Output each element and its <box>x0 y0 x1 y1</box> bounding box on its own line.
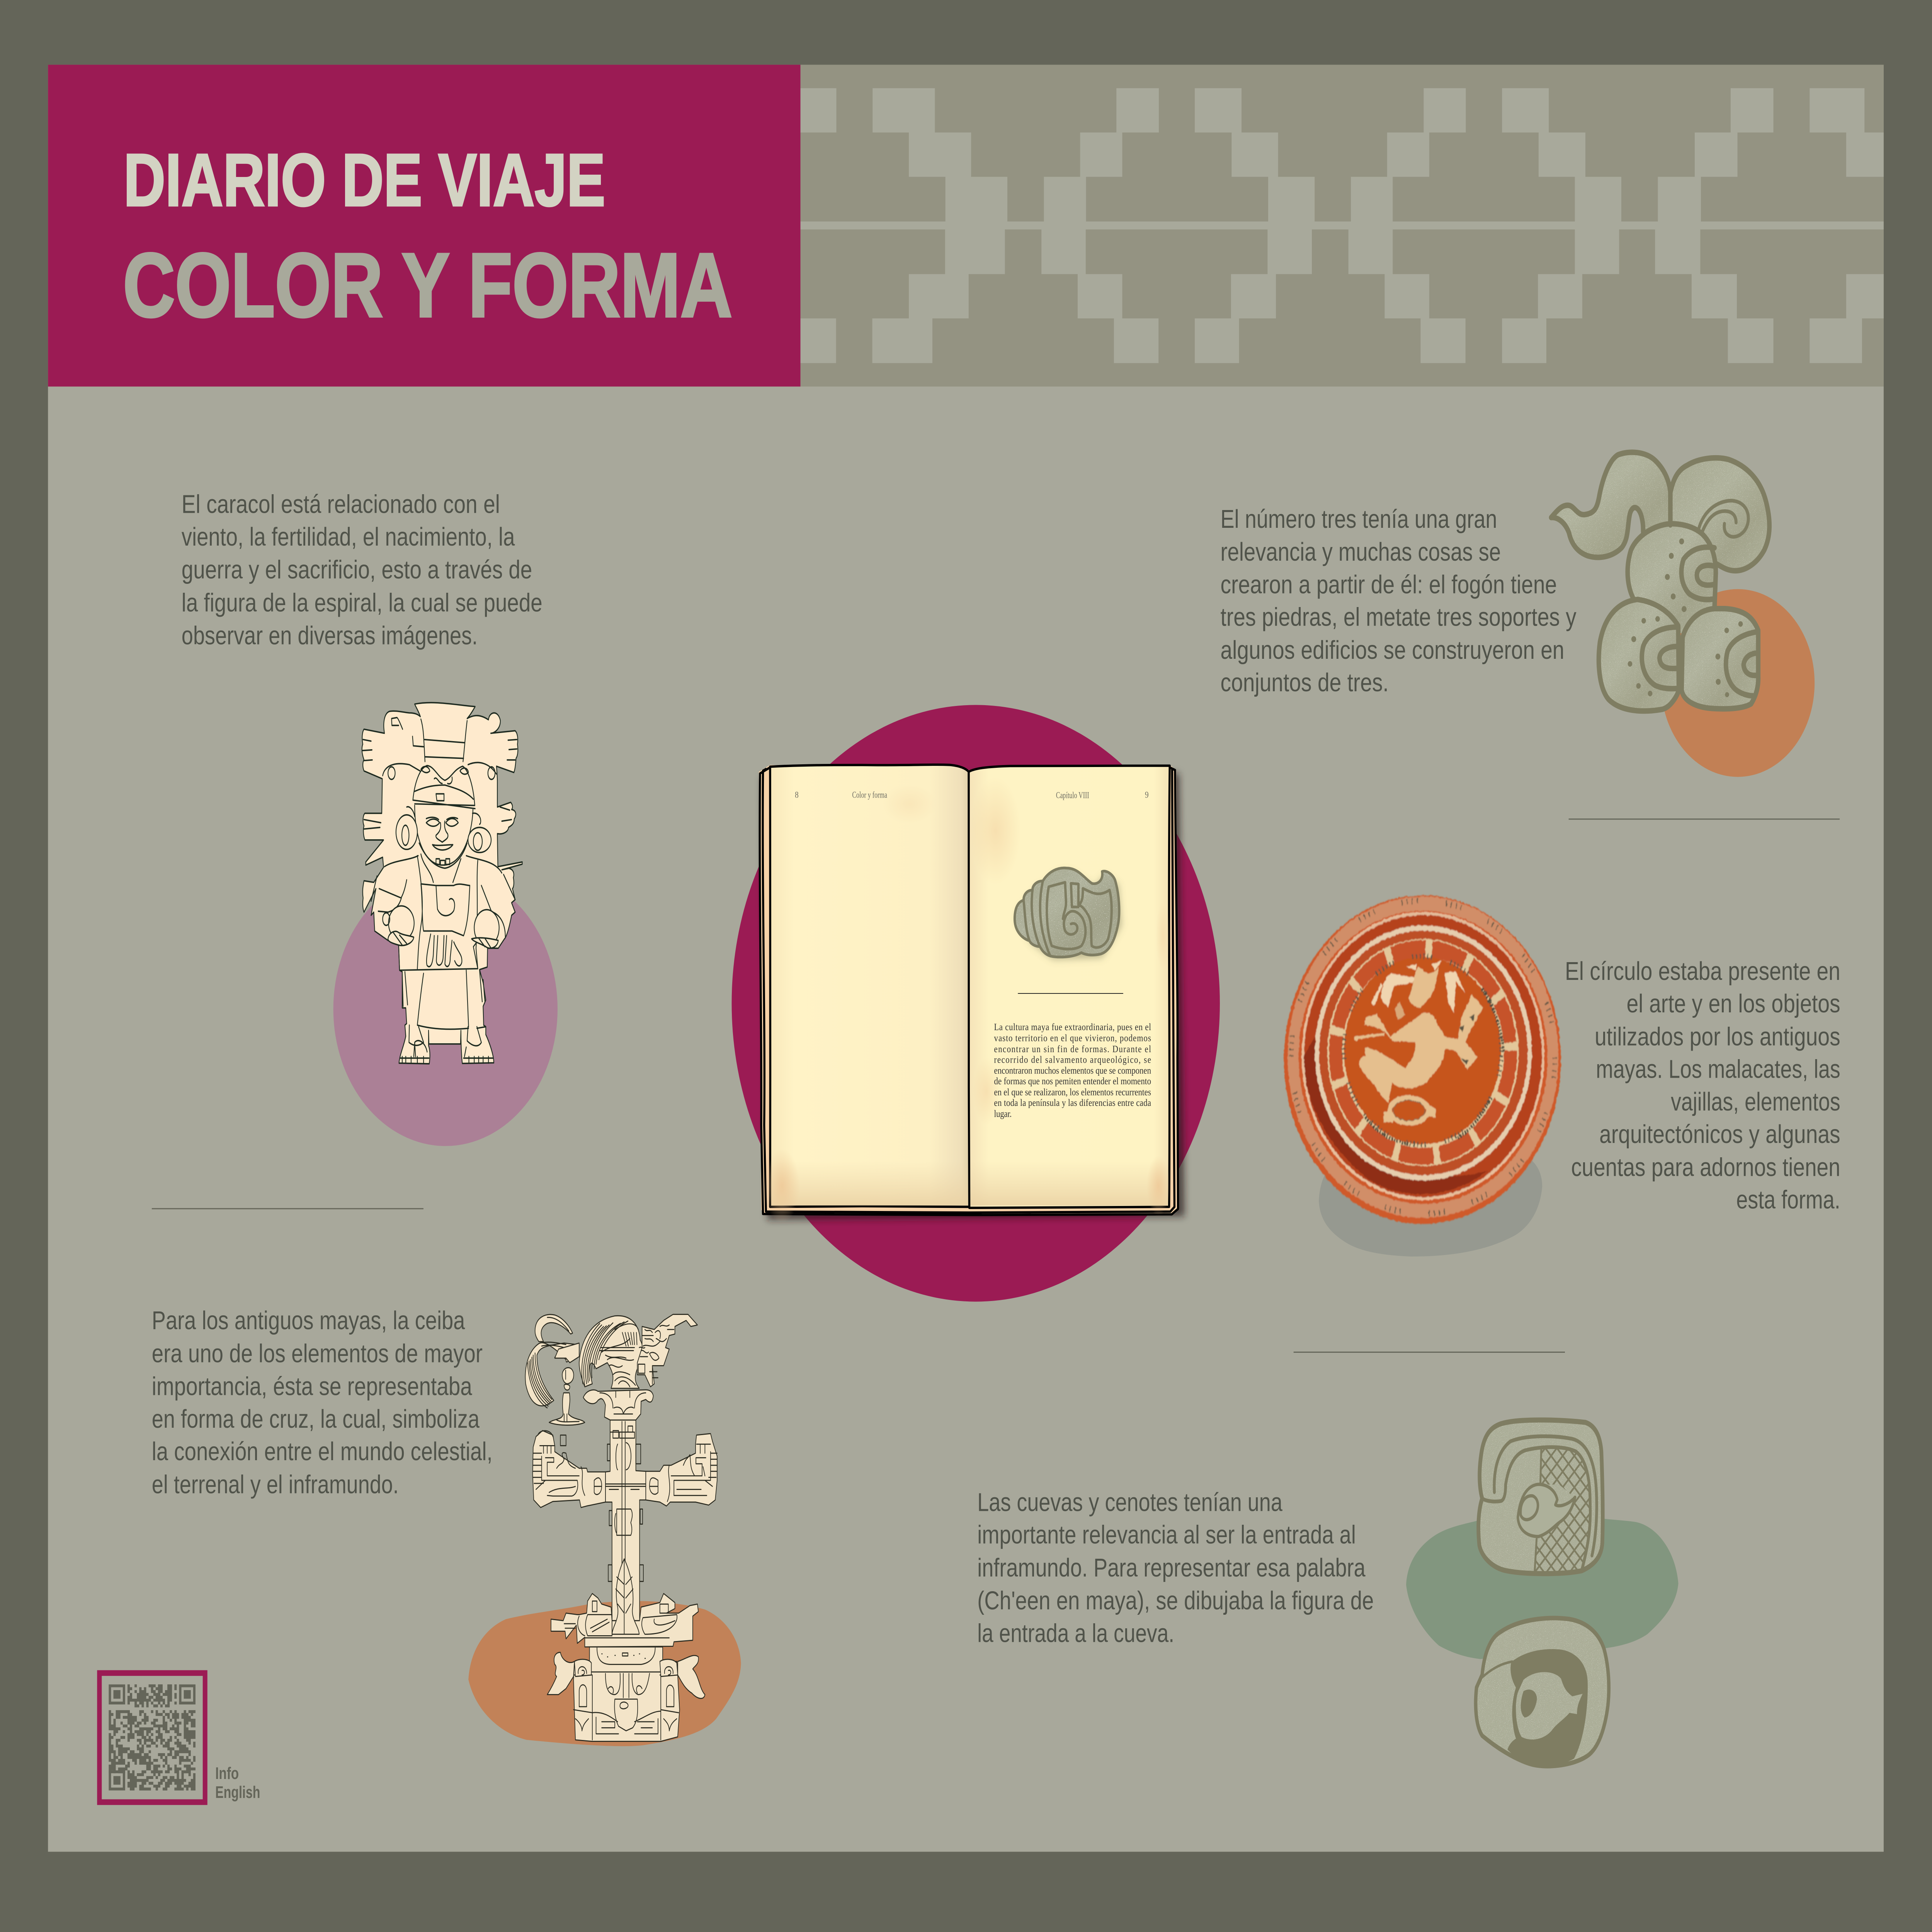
title line 2: COLOR Y FORMA <box>123 235 732 336</box>
text block: ceiba: Para los antiguos mayas, la ceiba <box>152 1306 465 1335</box>
illustration: cave glyphs on green blob <box>1406 1420 1679 1766</box>
text block: cuevas: importante relevancia al ser la entrada al <box>977 1520 1356 1549</box>
divider <box>152 1208 423 1209</box>
right page header: Capítulo VIII <box>1056 790 1089 800</box>
right page <box>969 766 1170 1208</box>
text block: caracol: El caracol está relacionado con el <box>182 490 500 519</box>
text block: numero tres: relevancia y muchas cosas se <box>1221 537 1501 566</box>
book body text: La cultura maya fue extraordinaria, pues en el <box>994 1022 1151 1033</box>
text block: numero tres: algunos edificios se construyeron en <box>1221 636 1564 664</box>
text block: caracol <box>182 490 543 650</box>
text block: caracol: la figura de la espiral, la cual se puede <box>182 588 543 617</box>
QR code with frame <box>99 1673 205 1802</box>
text block: numero tres: crearon a partir de él: el fogón tiene <box>1221 570 1557 599</box>
text block: circulo: El círculo estaba presente en <box>1565 957 1840 985</box>
text block: numero tres: tres piedras, el metate tres soportes y <box>1221 602 1577 631</box>
left page header <box>795 790 887 800</box>
title panel <box>48 65 801 386</box>
text block: cuevas: la entrada a la cueva. <box>977 1619 1174 1648</box>
book body text: encontraron muchos elementos que se componen <box>994 1065 1151 1076</box>
book body text: encontrar un sin fin de formas. Durante el <box>994 1044 1151 1054</box>
text block: numero tres: conjuntos de tres. <box>1221 668 1389 697</box>
text block: caracol: observar en diversas imágenes. <box>182 621 478 650</box>
book body text <box>994 1022 1151 1119</box>
book body text: en el que se realizaron, los elementos recurrentes <box>994 1087 1151 1098</box>
text block: ceiba: importancia, ésta se representaba <box>152 1372 472 1401</box>
text block: circulo: cuentas para adornos tienen <box>1571 1153 1840 1182</box>
illustration: deity statue with snail pendant on mauve circle <box>333 702 558 1146</box>
left arm <box>532 1430 605 1507</box>
book body text: recorrido del salvamento arqueológico, se <box>994 1054 1151 1065</box>
page stack <box>759 765 1179 1215</box>
left page header: Color y forma <box>852 790 887 800</box>
text block: cuevas: Las cuevas y cenotes tenían una <box>977 1488 1282 1517</box>
left page <box>770 765 969 1207</box>
text block: circulo: esta forma. <box>1736 1185 1840 1214</box>
text block: cuevas: (Ch'een en maya), se dibujaba la figura de <box>977 1586 1374 1615</box>
circle behind book <box>732 705 1220 1302</box>
text block: circulo <box>1565 957 1840 1214</box>
text block: cuevas <box>977 1488 1374 1648</box>
text block: ceiba: en forma de cruz, la cual, simboliza <box>152 1405 480 1433</box>
book body text: lugar. <box>994 1109 1012 1119</box>
glyph: cave entrance <box>1476 1618 1609 1766</box>
text block: circulo: utilizados por los antiguos <box>1595 1022 1840 1051</box>
divider <box>1294 1352 1565 1353</box>
divider <box>1569 818 1840 820</box>
header decorative band: Maya step fret <box>801 65 1884 386</box>
text block: numero tres <box>1221 505 1577 697</box>
book snail glyph <box>1015 868 1121 959</box>
text block: caracol: viento, la fertilidad, el nacimiento, la <box>182 522 515 551</box>
base with serpent bar <box>551 1594 698 1647</box>
book body text: de formas que nos pemiten entender el momento <box>994 1076 1151 1087</box>
right page header: 9 <box>1145 790 1149 800</box>
capital <box>583 1390 653 1420</box>
illustration: three stones glyph on orange circle <box>1551 452 1815 777</box>
book shadow <box>762 774 1185 1220</box>
illustration: ceiba cross on orange blob <box>468 1315 741 1746</box>
page ageing stains <box>764 777 1170 1223</box>
text block: circulo: vajillas, elementos <box>1671 1087 1840 1116</box>
text block: ceiba: era uno de los elementos de mayor <box>152 1339 483 1368</box>
book body text: vasto territorio en el que vivieron, podemos <box>994 1033 1151 1044</box>
text block: ceiba <box>152 1306 493 1499</box>
book divider line <box>1018 993 1123 994</box>
QR caption <box>215 1764 260 1802</box>
left page header: 8 <box>795 790 799 800</box>
QR caption: English <box>215 1783 260 1802</box>
title line 1: DIARIO DE VIAJE <box>124 139 605 222</box>
text block: numero tres: El número tres tenía una gran <box>1221 505 1497 533</box>
text block: circulo: arquitectónicos y algunas <box>1599 1120 1840 1148</box>
right page header <box>1056 790 1149 800</box>
glyph: net enclosure <box>1478 1420 1603 1576</box>
text block: ceiba: la conexión entre el mundo celestial, <box>152 1437 493 1466</box>
text block: cuevas: inframundo. Para representar esa palabra <box>977 1553 1366 1582</box>
illustration: open book <box>759 765 1185 1223</box>
QR caption: Info <box>215 1764 239 1783</box>
text block: caracol: guerra y el sacrificio, esto a través de <box>182 555 532 584</box>
illustration: painted Maya plate with shadow <box>1284 895 1561 1257</box>
text block: ceiba: el terrenal y el inframundo. <box>152 1470 399 1499</box>
text block: circulo: el arte y en los objetos <box>1627 989 1840 1018</box>
cross trunk and arms <box>605 1420 646 1621</box>
right arm <box>646 1434 717 1506</box>
text block: circulo: mayas. Los malacates, las <box>1596 1054 1840 1083</box>
book body text: en toda la península y las diferencias entre cada <box>994 1097 1151 1109</box>
bird and plumes on top <box>525 1315 697 1446</box>
